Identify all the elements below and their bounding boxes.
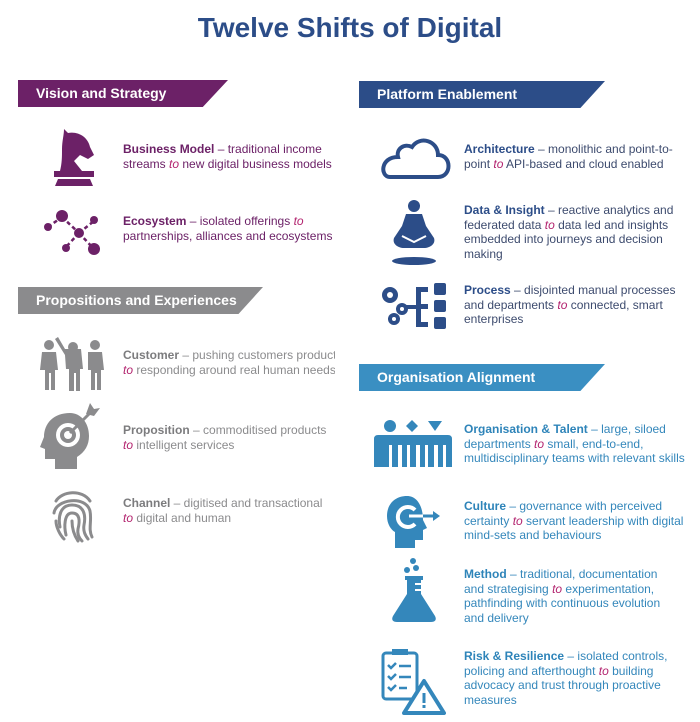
text: Proposition: Proposition – commoditised products bbox=[123, 423, 326, 437]
text: Architecture: point to API-based and cloud enabled bbox=[464, 156, 664, 170]
text: Customer: Customer – pushing customers product bbox=[123, 348, 335, 362]
text: Culture: certainty to servant leadership with digital bbox=[464, 514, 683, 528]
text: Data & Insight bbox=[464, 203, 673, 260]
text: Method: and delivery bbox=[464, 610, 529, 624]
text: Business Model: Business Model – traditional income bbox=[123, 142, 322, 156]
icon: ecosystem network bbox=[44, 210, 100, 255]
text: Channel bbox=[123, 496, 322, 524]
text: Ecosystem: partnerships, alliances and ecosystems bbox=[123, 228, 332, 242]
text: Data & Insight: making bbox=[464, 246, 503, 260]
text: Process: enterprises bbox=[464, 312, 523, 326]
text: Proposition: to intelligent services bbox=[123, 438, 234, 452]
title: Twelve Shifts of Digital bbox=[198, 12, 502, 43]
icon: fingerprint bbox=[52, 491, 94, 543]
text: Architecture: Architecture – monolithic and point-to- bbox=[464, 142, 673, 156]
text: Proposition bbox=[123, 423, 326, 452]
text: Customer bbox=[123, 348, 335, 376]
icon: chess knight bbox=[54, 129, 94, 186]
text: Business Model bbox=[123, 142, 332, 170]
text: Risk & Resilience: policing and afterthought to building bbox=[464, 664, 653, 678]
text: Architecture bbox=[464, 142, 673, 170]
text: Ecosystem: Ecosystem – isolated offerings to bbox=[123, 214, 304, 228]
icon: culture head bbox=[387, 496, 440, 548]
icon: organisation team bbox=[374, 420, 452, 467]
text: Ecosystem bbox=[123, 214, 332, 242]
text: Data & Insight: embedded into journeys and decision bbox=[464, 232, 663, 246]
banner: Propositions and Experiences: Propositions and Experiences bbox=[36, 292, 237, 308]
icon: process gears bbox=[382, 283, 446, 329]
icon: checklist warning bbox=[382, 649, 446, 715]
text: Data & Insight: federated data to data led and insights bbox=[464, 218, 668, 232]
text: Risk & Resilience: measures bbox=[464, 692, 517, 706]
banner: Organisation Alignment: Organisation Alignment bbox=[377, 369, 535, 385]
text: Method: and strategising to experimentation, bbox=[464, 582, 654, 596]
banner: Vision and Strategy: Vision and Strategy bbox=[36, 85, 166, 101]
text: Organisation & Talent bbox=[464, 422, 685, 465]
text: Method: Method – traditional, documentation bbox=[464, 567, 657, 581]
text: Risk & Resilience: advocacy and trust through proactive bbox=[464, 678, 661, 692]
text: Channel: Channel – digitised and transactional bbox=[123, 496, 322, 510]
text: Data & Insight: Data & Insight – reactive analytics and bbox=[464, 203, 673, 217]
icon: flask bbox=[392, 558, 436, 622]
icon: meditating person bbox=[392, 200, 436, 265]
text: Organisation & Talent: Organisation & Talent – large, siloed bbox=[464, 422, 666, 436]
icon: head with target bbox=[40, 403, 100, 469]
banner: Vision and Strategy bbox=[18, 80, 228, 107]
text: Process bbox=[464, 283, 676, 326]
text: Culture bbox=[464, 499, 683, 542]
text: Organisation & Talent: multidisciplinary teams with relevant skills bbox=[464, 451, 685, 465]
text: Risk & Resilience bbox=[464, 649, 667, 706]
text: Risk & Resilience: Risk & Resilience – isolated controls, bbox=[464, 649, 667, 663]
banner: Propositions and Experiences bbox=[18, 287, 263, 314]
text: Channel: to digital and human bbox=[123, 510, 231, 524]
text: Method bbox=[464, 567, 660, 624]
banner: Platform Enablement: Platform Enablement bbox=[377, 86, 517, 102]
text: Organisation & Talent: departments to small, end-to-end, bbox=[464, 436, 643, 450]
text: Culture: mind-sets and behaviours bbox=[464, 528, 601, 542]
icon: customers bbox=[40, 337, 104, 391]
banner: Organisation Alignment bbox=[359, 364, 605, 391]
icon: cloud bbox=[381, 138, 450, 179]
text: Method: pathfinding with continuous evolution bbox=[464, 596, 660, 610]
text: Culture: Culture – governance with perceived bbox=[464, 499, 662, 513]
text: Customer: to responding around real human needs bbox=[123, 362, 335, 376]
banner: Platform Enablement bbox=[359, 81, 605, 108]
text: Process: Process – disjointed manual processes bbox=[464, 283, 675, 297]
text: Process: and departments to connected, smart bbox=[464, 298, 663, 312]
text: Business Model: streams to new digital business models bbox=[123, 156, 332, 170]
